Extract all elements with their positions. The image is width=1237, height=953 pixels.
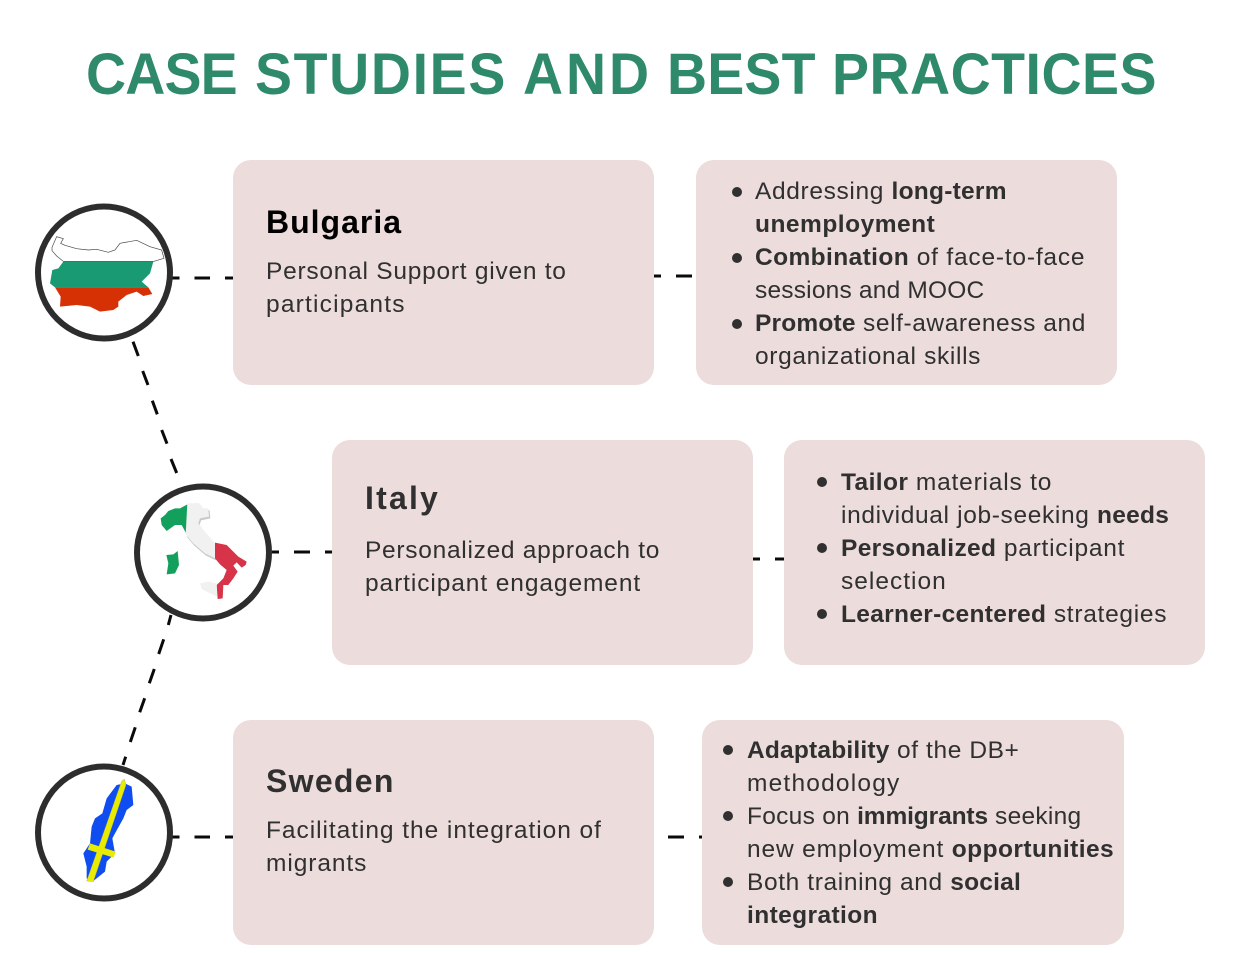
- text: Bulgaria summary: participants: [266, 291, 406, 318]
- bullet list: Sweden: new employment opportunities: [747, 836, 1114, 863]
- panel: Sweden summary: [233, 720, 654, 945]
- title: STUDIES: [254, 42, 506, 107]
- title: CASE: [86, 42, 237, 107]
- bullet list: Sweden: Adaptability of the DB+: [747, 737, 1019, 764]
- text: Sweden summary: migrants: [266, 850, 367, 877]
- icon: Italy map in circle: [134, 484, 272, 622]
- bullet list: Bulgaria: unemployment: [755, 211, 935, 238]
- panel: Bulgaria practices: [696, 160, 1117, 385]
- bullet list: Sweden: Both training and social: [747, 869, 1021, 896]
- text: Sweden summary: [266, 817, 602, 877]
- bullet list: Bulgaria: organizational skills: [755, 343, 981, 370]
- bullet list: Sweden: [723, 737, 1114, 929]
- text: Italy summary: Personalized approach to: [365, 537, 660, 564]
- text: Bulgaria summary: [266, 258, 567, 318]
- panel: Sweden practices: [702, 720, 1124, 945]
- text: Italy summary: [365, 537, 660, 597]
- bullet list: Bulgaria: Combination of face-to-face: [755, 244, 1085, 271]
- bullet list: Italy: Tailor materials to: [841, 469, 1052, 496]
- bullet list: Italy: Personalized participant: [841, 535, 1125, 562]
- bullet list: Italy: [817, 469, 1169, 628]
- text: Italy summary: participant engagement: [365, 570, 641, 597]
- bullet list: Bulgaria: Promote self-awareness and: [755, 310, 1086, 337]
- heading: Italy: Italy: [365, 480, 440, 516]
- panel: Italy summary: [332, 440, 753, 665]
- bullet list: Sweden: integration: [747, 902, 878, 929]
- bullet list: Bulgaria: sessions and MOOC: [755, 277, 984, 304]
- bullet list: Italy: selection: [841, 568, 947, 595]
- panel: Bulgaria summary: [233, 160, 654, 385]
- title: [86, 42, 1157, 107]
- heading: Sweden: Sweden: [266, 763, 395, 799]
- heading: Bulgaria: Bulgaria: [266, 204, 402, 240]
- bullet list: Sweden: Focus on immigrants seeking: [747, 803, 1081, 830]
- bullet list: Sweden: methodology: [747, 770, 900, 797]
- bullet list: Bulgaria: [732, 178, 1086, 370]
- text: Bulgaria summary: Personal Support given to: [266, 258, 567, 285]
- title: AND: [523, 42, 652, 107]
- bullet list: Italy: individual job-seeking needs: [841, 502, 1169, 529]
- bullet list: Bulgaria: Addressing long-term: [755, 178, 1007, 205]
- bullet list: Italy: Learner-centered strategies: [841, 601, 1167, 628]
- text: Sweden summary: Facilitating the integration of: [266, 817, 602, 844]
- panel: Italy practices: [784, 440, 1205, 665]
- icon: Bulgaria map in circle: [35, 204, 173, 342]
- title: BEST: [667, 42, 816, 107]
- title: PRACTICES: [832, 42, 1157, 107]
- icon: Sweden map in circle: [35, 764, 173, 902]
